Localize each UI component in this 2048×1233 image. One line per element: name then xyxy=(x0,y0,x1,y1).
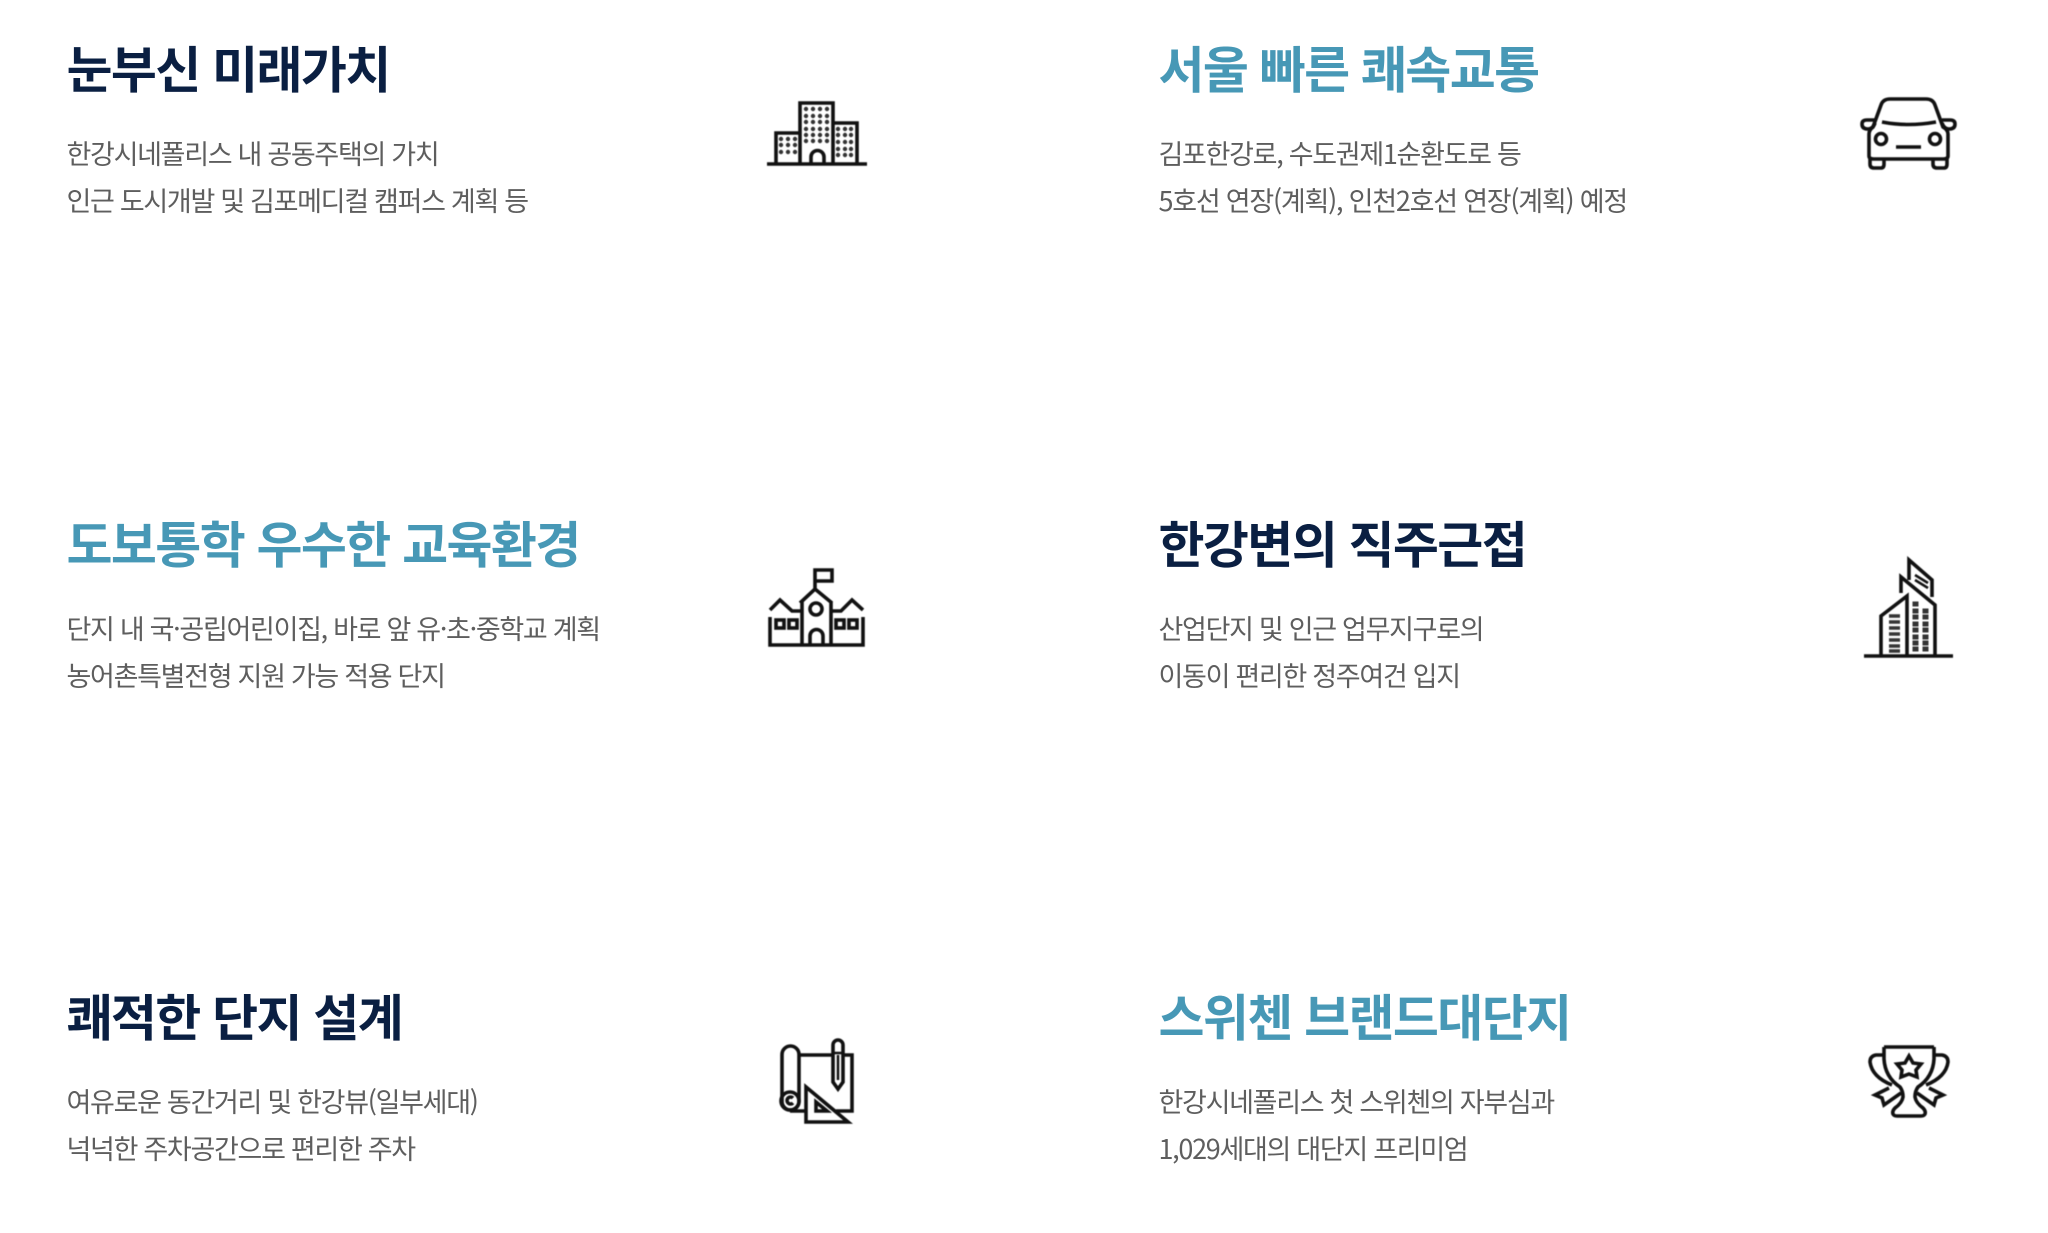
text block: 인근 도시개발 및 김포메디컬 캠퍼스 계획 등 xyxy=(66,180,528,219)
icon: car xyxy=(1859,96,1958,171)
heading: 쾌적한 단지 설계 xyxy=(66,979,402,1051)
heading: 도보통학 우수한 교육환경 xyxy=(66,506,580,578)
text block: 이동이 편리한 정주여건 입지 xyxy=(1158,655,1460,694)
heading: 스위첸 브랜드대단지 xyxy=(1158,979,1570,1051)
text block xyxy=(66,608,600,694)
text block: 1,029세대의 대단지 프리미엄 xyxy=(1158,1128,1467,1167)
text block: 여유로운 동간거리 및 한강뷰(일부세대) xyxy=(66,1081,478,1120)
text block: 한강시네폴리스 내 공동주택의 가치 xyxy=(66,133,438,172)
icon: trophy xyxy=(1867,1044,1951,1119)
text block: 넉넉한 주차공간으로 편리한 주차 xyxy=(66,1128,415,1167)
icon: office tower xyxy=(1863,556,1954,659)
panel: work proximity xyxy=(1158,506,1954,694)
text block: 김포한강로, 수도권제1순환도로 등 xyxy=(1158,133,1520,172)
heading: 서울 빠른 쾌속교통 xyxy=(1158,31,1538,103)
panel: fast transport xyxy=(1158,31,1958,219)
text block xyxy=(66,1081,478,1167)
text block xyxy=(1158,133,1627,219)
icon: buildings xyxy=(766,100,868,167)
text block: 농어촌특별전형 지원 가능 적용 단지 xyxy=(66,655,445,694)
icon: school xyxy=(767,567,866,648)
panel: complex design xyxy=(66,979,855,1167)
text block: 단지 내 국·공립어린이집, 바로 앞 유·초·중학교 계획 xyxy=(66,608,600,647)
heading: 한강변의 직주근접 xyxy=(1158,506,1526,578)
panel: future value xyxy=(66,31,868,219)
text block xyxy=(66,133,528,219)
text block: 5호선 연장(계획), 인천2호선 연장(계획) 예정 xyxy=(1158,180,1627,219)
panel: brand complex xyxy=(1158,979,1951,1167)
text block: 산업단지 및 인근 업무지구로의 xyxy=(1158,608,1483,647)
panel: education xyxy=(66,506,866,694)
text block xyxy=(1158,1081,1554,1167)
text block: 한강시네폴리스 첫 스위첸의 자부심과 xyxy=(1158,1081,1554,1120)
heading: 눈부신 미래가치 xyxy=(66,31,390,103)
icon: blueprint xyxy=(778,1037,855,1125)
text block xyxy=(1158,608,1483,694)
